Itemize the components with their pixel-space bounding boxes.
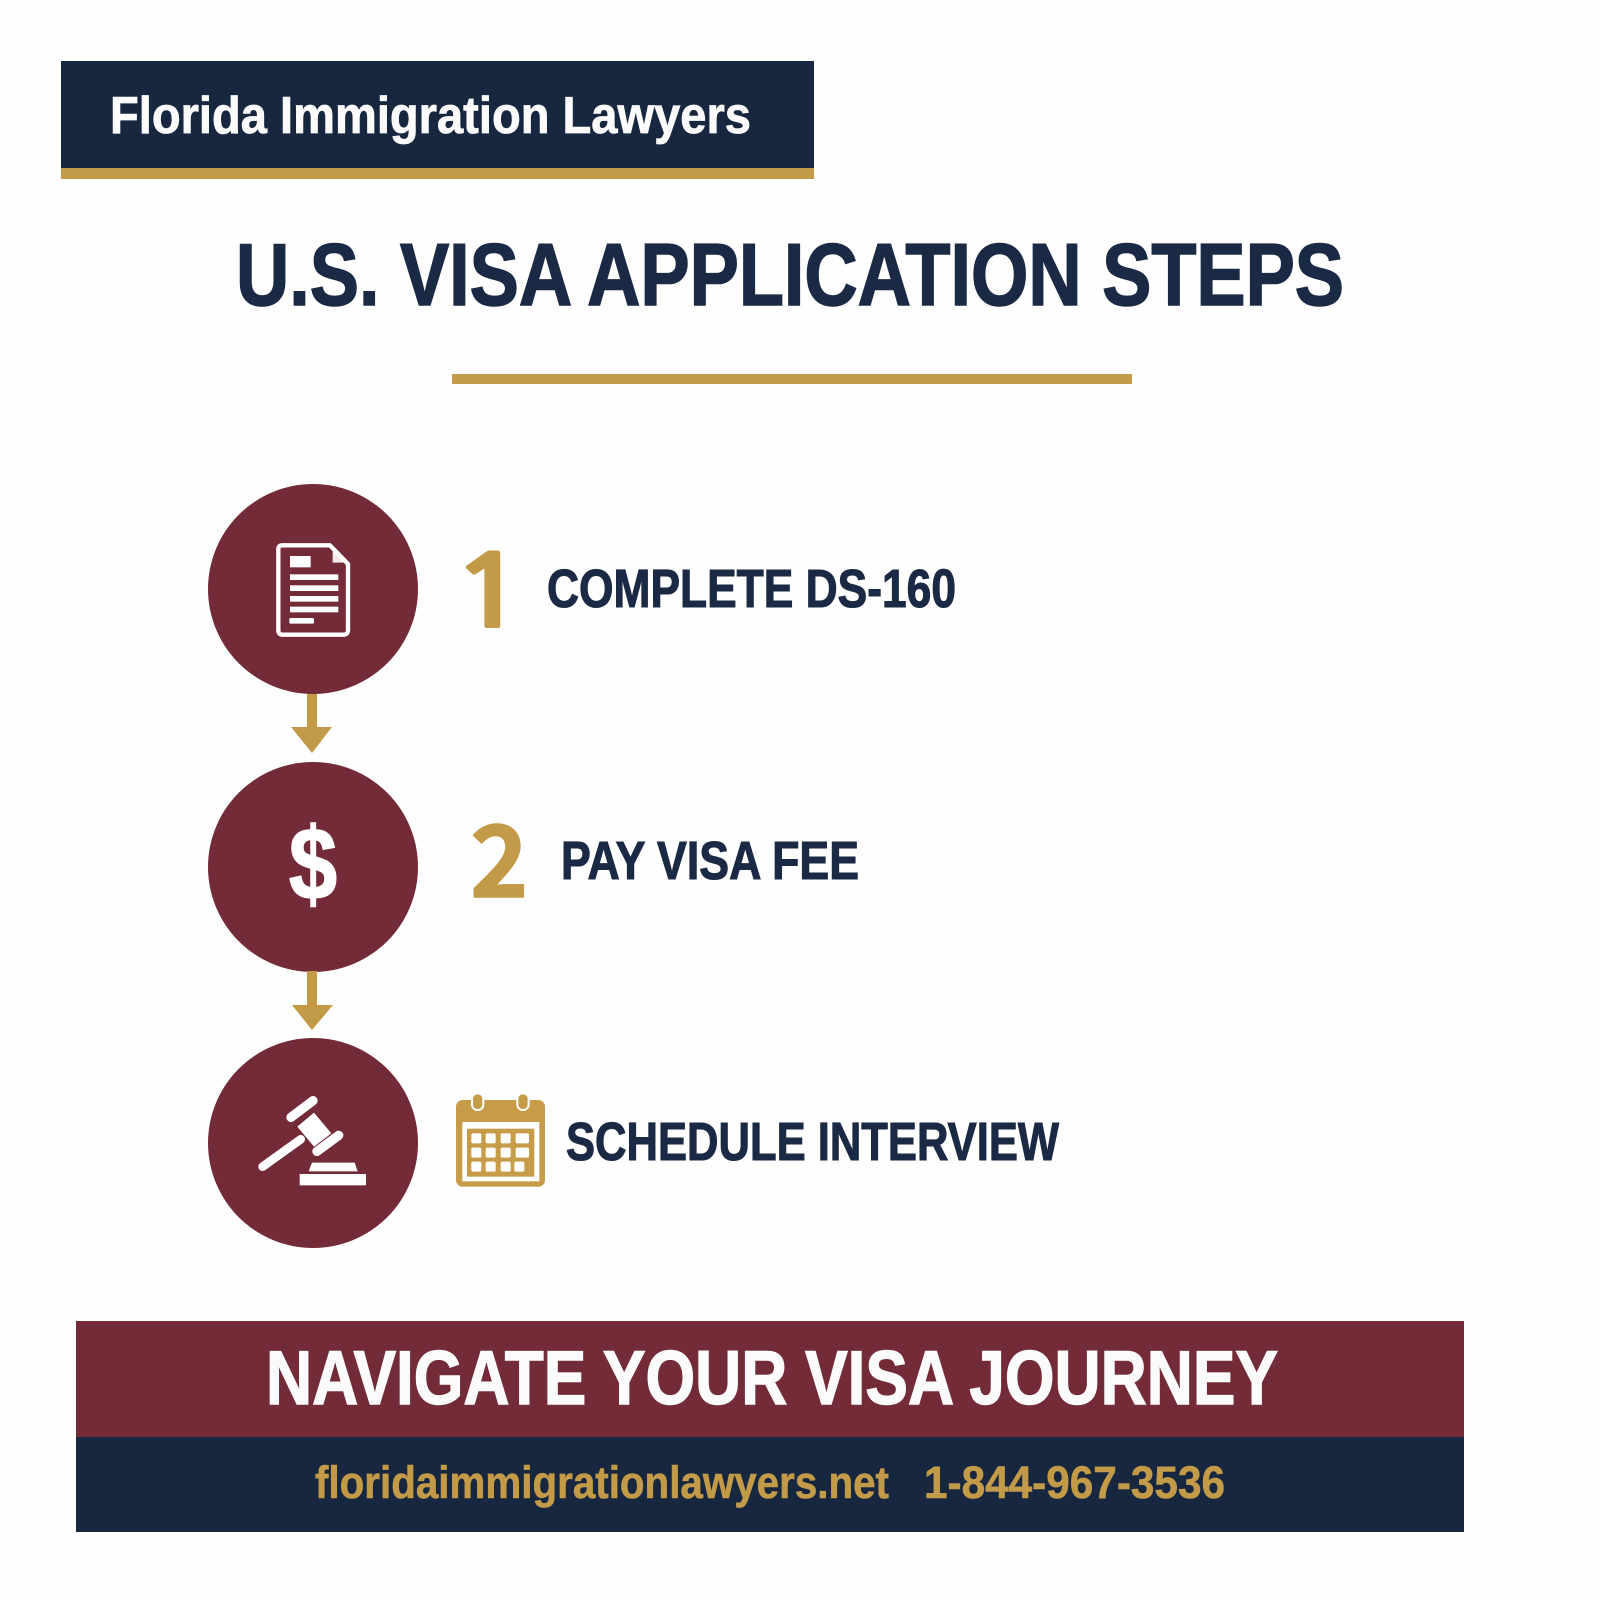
header firm name: Florida Immigration Lawyers — [110, 87, 751, 145]
footer phone: 1-844-967-3536 — [924, 1457, 1225, 1508]
step 2 circle with dollar icon — [208, 762, 418, 972]
step 1 circle with document icon — [208, 484, 418, 694]
arrow 2 — [292, 971, 333, 1030]
footer headline: NAVIGATE YOUR VISA JOURNEY — [266, 1336, 1278, 1421]
step 3 circle with gavel icon — [208, 1038, 418, 1248]
step 1 number: 1 — [450, 543, 529, 643]
footer banner — [76, 1321, 1464, 1532]
step 3 label: SCHEDULE INTERVIEW — [566, 1112, 1059, 1172]
step 2 number: 2 — [470, 782, 528, 926]
step 2 label: PAY VISA FEE — [561, 831, 859, 891]
footer website: floridaimmigrationlawyers.net — [315, 1457, 889, 1508]
title: U.S. VISA APPLICATION STEPS — [236, 225, 1344, 324]
icon: document — [278, 545, 348, 635]
icon: gavel — [263, 1101, 366, 1185]
step 1 label: COMPLETE DS-160 — [547, 559, 956, 619]
icon: calendar — [456, 1093, 545, 1187]
icon: dollar sign: $ — [289, 807, 337, 922]
arrow 1 — [291, 694, 332, 753]
header banner — [61, 61, 814, 179]
